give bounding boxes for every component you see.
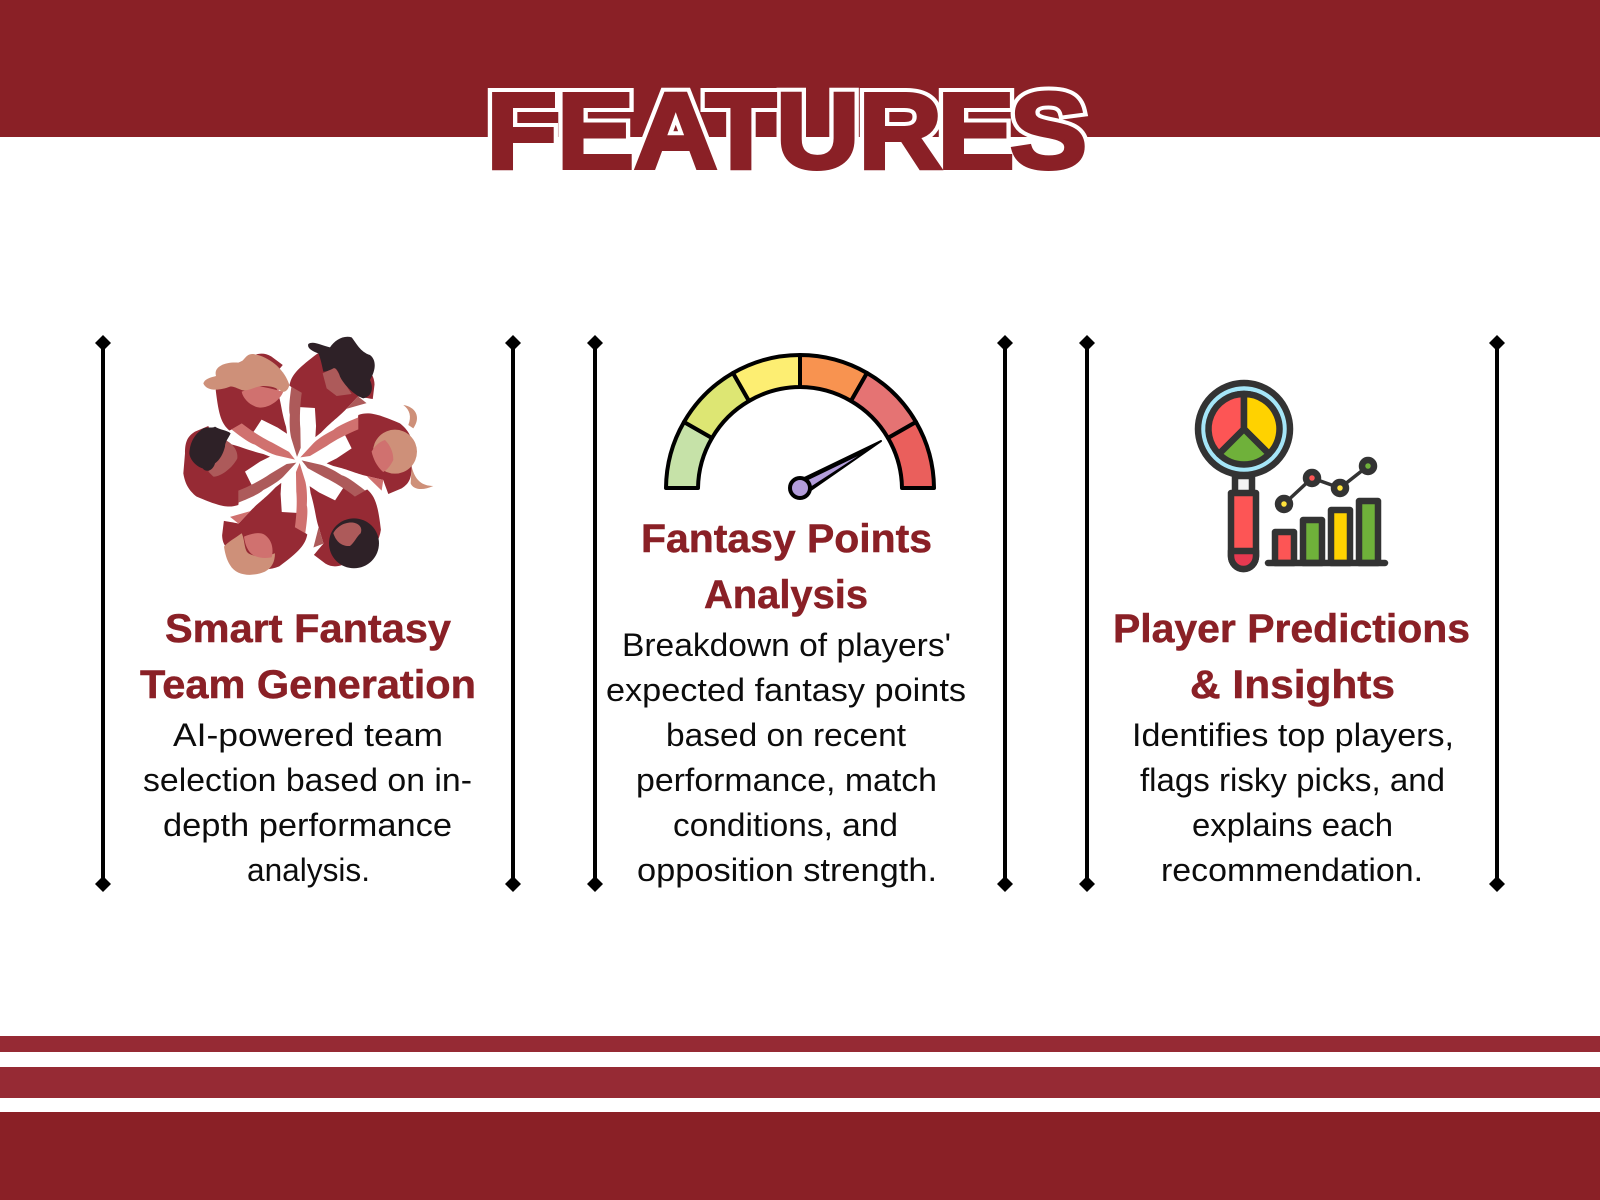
heading: player predictions and insights: Player Predictions — [1113, 607, 1470, 651]
heading: fantasy points analysis: Fantasy Points — [641, 517, 932, 561]
text: smart fantasy description: AI-powered team — [173, 717, 443, 753]
text: player predictions description: recommendation. — [1161, 852, 1423, 888]
text: fantasy points description — [606, 627, 966, 888]
top header band — [0, 0, 1600, 137]
text: player predictions description: Identifies top players, — [1132, 717, 1454, 753]
heading: smart fantasy team generation: Smart Fantasy — [165, 607, 452, 651]
heading: player predictions and insights: & Insights — [1190, 663, 1395, 707]
text: fantasy points description: expected fantasy points — [606, 672, 966, 708]
text: smart fantasy description: analysis. — [247, 852, 370, 888]
heading: fantasy points analysis — [641, 517, 932, 617]
panel: fantasy points analysis — [587, 335, 1013, 892]
text: fantasy points description: Breakdown of players' — [622, 627, 951, 663]
text: player predictions description — [1132, 717, 1454, 888]
text: player predictions description: explains each — [1192, 807, 1393, 843]
text: smart fantasy description — [143, 717, 472, 888]
heading: player predictions and insights — [1113, 607, 1470, 707]
divider right with diamonds — [505, 335, 521, 892]
heading: smart fantasy team generation — [140, 607, 476, 707]
text: smart fantasy description: selection based on in- — [143, 762, 472, 798]
divider right with diamonds — [997, 335, 1013, 892]
icon: magnifier with pie chart and bar chart — [1198, 383, 1385, 569]
panel: player predictions and insights — [1079, 335, 1505, 892]
text: smart fantasy description: depth performance — [163, 807, 452, 843]
panel: smart fantasy team generation — [95, 335, 521, 892]
heading: fantasy points analysis: Analysis — [704, 573, 868, 617]
text: fantasy points description: performance, match — [636, 762, 937, 798]
title: FEATURES — [487, 70, 1087, 191]
text: fantasy points description: based on recent — [666, 717, 906, 753]
divider left with diamonds — [95, 335, 111, 892]
heading: smart fantasy team generation: Team Generation — [140, 663, 476, 707]
divider left with diamonds — [587, 335, 603, 892]
divider left with diamonds — [1079, 335, 1095, 892]
divider right with diamonds — [1489, 335, 1505, 892]
title: FEATURES — [487, 70, 1087, 191]
text: fantasy points description: opposition strength. — [637, 852, 937, 888]
footer stripes — [0, 1036, 1600, 1200]
icon: six people huddled with hands joined — [183, 337, 433, 583]
icon: gauge — [666, 355, 934, 498]
text: fantasy points description: conditions, and — [673, 807, 898, 843]
text: player predictions description: flags risky picks, and — [1140, 762, 1445, 798]
